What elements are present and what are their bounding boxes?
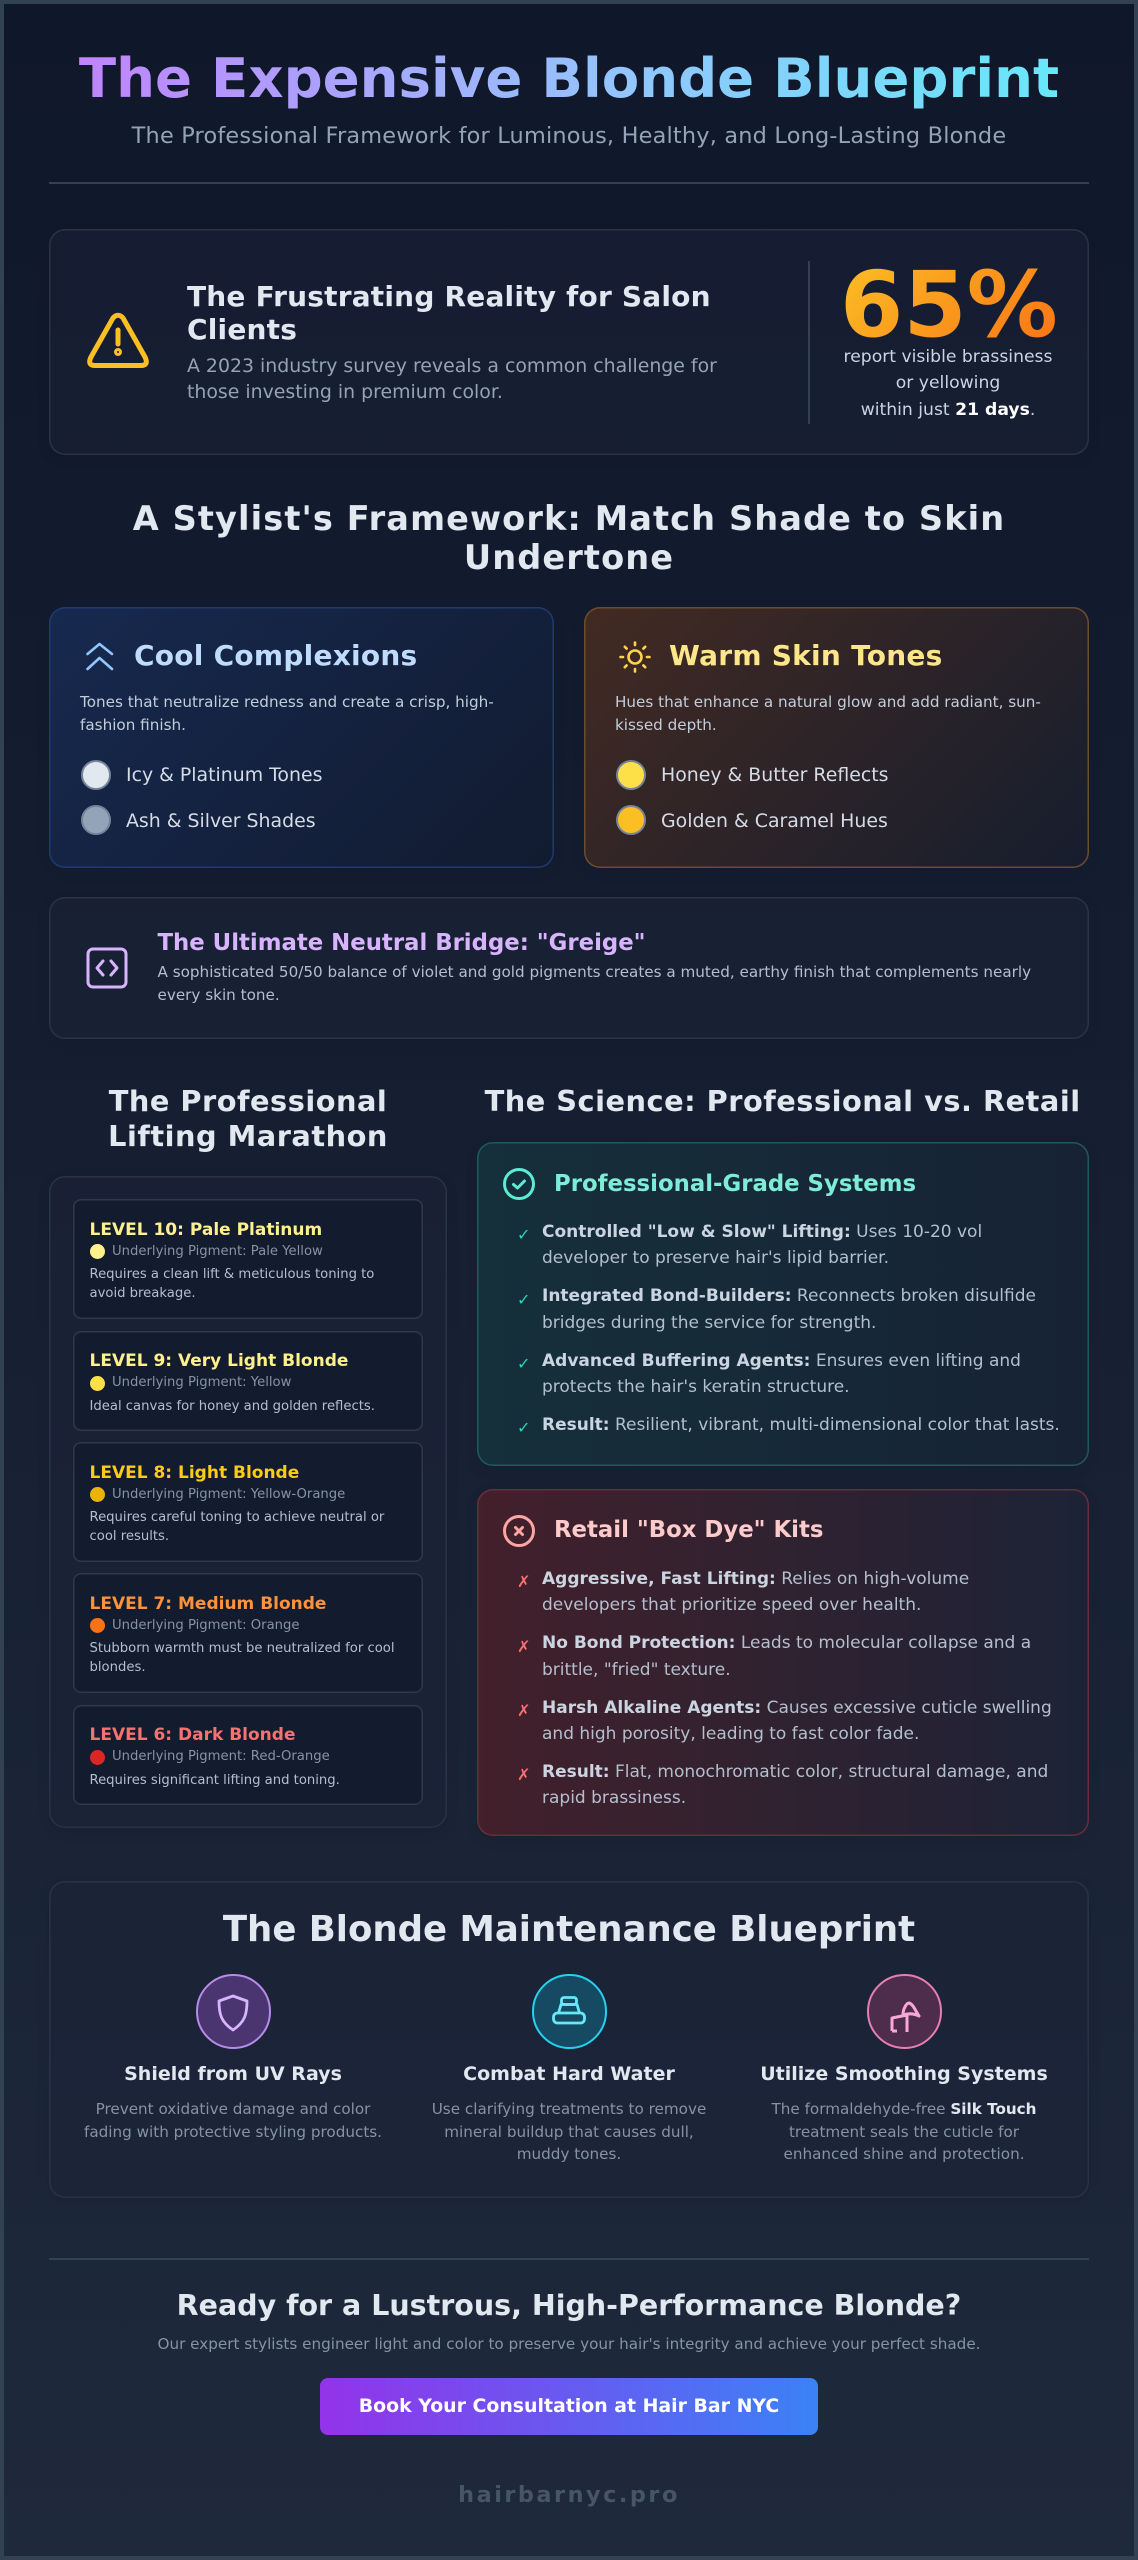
icon: code square: [86, 948, 128, 988]
list item: [542, 1569, 969, 1615]
text: smoothing description: [771, 2100, 1036, 2163]
cross mark: ✗: [517, 1572, 530, 1591]
level note: Ideal canvas for honey and golden reflects.: [90, 1399, 375, 1414]
pigment dot: [90, 1487, 104, 1502]
icon: shield: [196, 1974, 270, 2048]
list item: [542, 1222, 982, 1268]
icon: sun: [619, 641, 651, 673]
list item: Result: Resilient, vibrant, multi-dimensional color that lasts.: [542, 1415, 1060, 1435]
description: every skin tone.: [158, 986, 280, 1004]
level note: cool results.: [90, 1529, 169, 1544]
list item: [542, 1762, 1048, 1808]
heading: Warm Skin Tones: [669, 639, 943, 672]
list item: [542, 1286, 1036, 1333]
list item: Controlled "Low & Slow" Lifting: Uses 10-20 vol: [542, 1222, 982, 1242]
text: smoothing description: enhanced shine and protection.: [783, 2145, 1025, 2163]
card: level 8: [73, 1442, 423, 1562]
subtitle: The Professional Framework for Luminous, Healthy, and Long-Lasting Blonde: [132, 123, 1006, 149]
panel: retail box dye: [477, 1489, 1089, 1836]
pigment label: Underlying Pigment: Orange: [112, 1618, 300, 1633]
swatch: golden: [616, 805, 646, 835]
stat caption: report visible brassiness: [844, 347, 1052, 367]
heading: Cool Complexions: [134, 639, 417, 672]
level title: LEVEL 9: Very Light Blonde: [90, 1351, 348, 1371]
heading: call to action: Ready for a Lustrous, High-Performance Blonde?: [177, 2289, 961, 2322]
level note: Requires significant lifting and toning.: [90, 1773, 340, 1788]
level note: avoid breakage.: [90, 1286, 196, 1301]
heading: The Ultimate Neutral Bridge: "Greige": [158, 930, 646, 956]
description: fashion finish.: [80, 716, 186, 734]
list item: [542, 1698, 1052, 1744]
heading: stylist's framework: [132, 499, 1005, 577]
icon: warning triangle: [87, 312, 149, 368]
description: Hues that enhance a natural glow and add radiant, sun-: [615, 693, 1041, 711]
list item: brittle, "fried" texture.: [542, 1660, 731, 1680]
check mark: ✓: [517, 1418, 530, 1437]
card: level 9: [73, 1330, 423, 1430]
check mark: ✓: [517, 1290, 530, 1308]
stat caption: or yellowing: [896, 373, 1000, 393]
panel: lifting levels: [49, 1176, 447, 1828]
heading: lifting marathon: The Professional: [109, 1084, 387, 1118]
description: those investing in premium color.: [187, 381, 503, 403]
level note: Requires a clean lift & meticulous toning to: [90, 1267, 374, 1282]
cross mark: ✗: [517, 1636, 530, 1656]
list item: [542, 1351, 1021, 1397]
description: Tones that neutralize redness and create a crisp, high-: [80, 693, 494, 711]
list item: Aggressive, Fast Lifting: Relies on high-volume: [542, 1569, 969, 1589]
pigment label: Underlying Pigment: Yellow: [112, 1375, 291, 1390]
level note: Stubborn warmth must be neutralized for cool: [90, 1641, 394, 1656]
heading: Professional-Grade Systems: [554, 1171, 916, 1197]
list item: developer to preserve hair's lipid barrier.: [542, 1248, 889, 1268]
description: kissed depth.: [615, 716, 717, 734]
footer url: hairbarnyc.pro: [458, 2482, 680, 2508]
pigment dot: [90, 1750, 104, 1764]
description: [615, 693, 1041, 734]
level title: LEVEL 10: Pale Platinum: [90, 1220, 322, 1240]
text: hard water title: Combat Hard Water: [463, 2063, 675, 2085]
level note: [90, 1641, 394, 1675]
heading: The Blonde Maintenance Blueprint: [223, 1909, 915, 1950]
icon: smoothing: [866, 1974, 942, 2048]
icon: check circle: [503, 1168, 535, 1200]
icon: stack: [532, 1974, 606, 2048]
heading: stylist's framework: Undertone: [464, 538, 674, 577]
description: [158, 963, 1031, 1004]
text: hard water description: muddy tones.: [517, 2145, 621, 2163]
list item: developers that prioritize speed over health.: [542, 1595, 921, 1615]
panel: professional-grade systems: [477, 1142, 1089, 1466]
check mark: ✓: [517, 1354, 530, 1373]
level note: [90, 1267, 374, 1301]
list item: Result: Flat, monochromatic color, structural damage, and: [542, 1762, 1048, 1782]
heading: Clients: [187, 313, 297, 346]
text: shield description: Prevent oxidative damage and color: [96, 2100, 370, 2118]
list item: No Bond Protection: Leads to molecular collapse and a: [542, 1633, 1031, 1653]
button: book consultation: [320, 2378, 818, 2434]
pigment dot: [90, 1376, 104, 1390]
panel: warm skin tones: [584, 607, 1089, 868]
heading: stylist's framework: A Stylist's Framework: Match Shade to Skin: [133, 499, 1005, 538]
pigment label: Underlying Pigment: Yellow-Orange: [112, 1487, 345, 1502]
list item: Advanced Buffering Agents: Ensures even lifting and: [542, 1351, 1021, 1371]
pigment label: Underlying Pigment: Red-Orange: [112, 1749, 330, 1764]
card: level 10: [73, 1199, 423, 1319]
level note: blondes.: [90, 1660, 146, 1675]
pigment dot: [90, 1618, 104, 1633]
heading: The Frustrating Reality for Salon: [187, 280, 711, 312]
panel: maintenance blueprint: [49, 1881, 1089, 2198]
swatch: icy: [80, 760, 110, 790]
label: icy: Icy & Platinum Tones: [126, 764, 322, 786]
description: A 2023 industry survey reveals a common challenge for: [187, 355, 717, 377]
text: hard water description: mineral buildup that causes dull,: [444, 2123, 694, 2141]
cross mark: ✗: [517, 1765, 530, 1784]
level note: Requires careful toning to achieve neutral or: [90, 1510, 384, 1525]
stat: 65%: 65%: [840, 253, 1058, 358]
heading: lifting marathon: [108, 1084, 388, 1152]
text: hard water description: [432, 2100, 706, 2163]
text: smoothing description: The formaldehyde-free Silk Touch: [772, 2100, 1036, 2118]
description: A sophisticated 50/50 balance of violet and gold pigments creates a muted, earthy finish that complements nearly: [158, 963, 1031, 981]
list item: Harsh Alkaline Agents: Causes excessive cuticle swelling: [542, 1698, 1052, 1718]
list item: Integrated Bond-Builders: Reconnects broken disulfide: [542, 1286, 1036, 1306]
heading: science: The Science: Professional vs. Retail: [485, 1084, 1081, 1118]
heading: [187, 280, 711, 346]
button: book consultation: Book Your Consultation at Hair Bar NYC: [359, 2395, 779, 2417]
title: The Expensive Blonde Blueprint: [79, 46, 1059, 110]
swatch: honey: [616, 760, 646, 790]
text: smoothing description: treatment seals the cuticle for: [789, 2123, 1019, 2141]
icon: x circle: [503, 1515, 535, 1547]
text: hard water description: Use clarifying treatments to remove: [432, 2100, 706, 2118]
list item: bridges during the service for strength.: [542, 1313, 876, 1333]
text: call to action description: Our expert stylists engineer light and color to preserve your hair's integrity and achieve your perfect shade.: [158, 2335, 980, 2353]
list item: and high porosity, leading to fast color fade.: [542, 1724, 919, 1744]
panel: frustrating reality: [49, 229, 1089, 455]
description: [80, 693, 494, 734]
list item: rapid brassiness.: [542, 1788, 686, 1808]
text: shield title: Shield from UV Rays: [124, 2063, 342, 2085]
panel: cool complexions: [49, 607, 554, 868]
cross mark: ✗: [517, 1701, 530, 1720]
stat caption: within just 21 days.: [861, 400, 1035, 420]
label: ash: Ash & Silver Shades: [126, 810, 316, 832]
description: [187, 355, 717, 403]
level note: [90, 1510, 384, 1544]
text: shield description: [84, 2100, 382, 2141]
level title: LEVEL 8: Light Blonde: [90, 1462, 299, 1482]
card: level 7: [73, 1573, 423, 1693]
icon: chevrons up: [86, 642, 114, 670]
text: smoothing title: Utilize Smoothing Systems: [760, 2063, 1048, 2085]
pigment label: Underlying Pigment: Pale Yellow: [112, 1244, 323, 1259]
check mark: ✓: [517, 1225, 530, 1244]
text: shield description: fading with protective styling products.: [84, 2123, 382, 2141]
list item: protects the hair's keratin structure.: [542, 1377, 850, 1397]
level title: LEVEL 6: Dark Blonde: [90, 1725, 295, 1745]
stat caption: [844, 347, 1052, 420]
label: golden: Golden & Caramel Hues: [661, 810, 888, 832]
panel: greige: [49, 897, 1089, 1039]
heading: lifting marathon: Lifting Marathon: [108, 1118, 388, 1152]
level title: LEVEL 7: Medium Blonde: [90, 1594, 326, 1614]
label: honey: Honey & Butter Reflects: [661, 764, 888, 786]
heading: Retail "Box Dye" Kits: [554, 1517, 823, 1543]
swatch: ash: [80, 805, 110, 835]
list item: [542, 1633, 1031, 1680]
pigment dot: [90, 1244, 104, 1259]
card: level 6: [73, 1704, 423, 1804]
